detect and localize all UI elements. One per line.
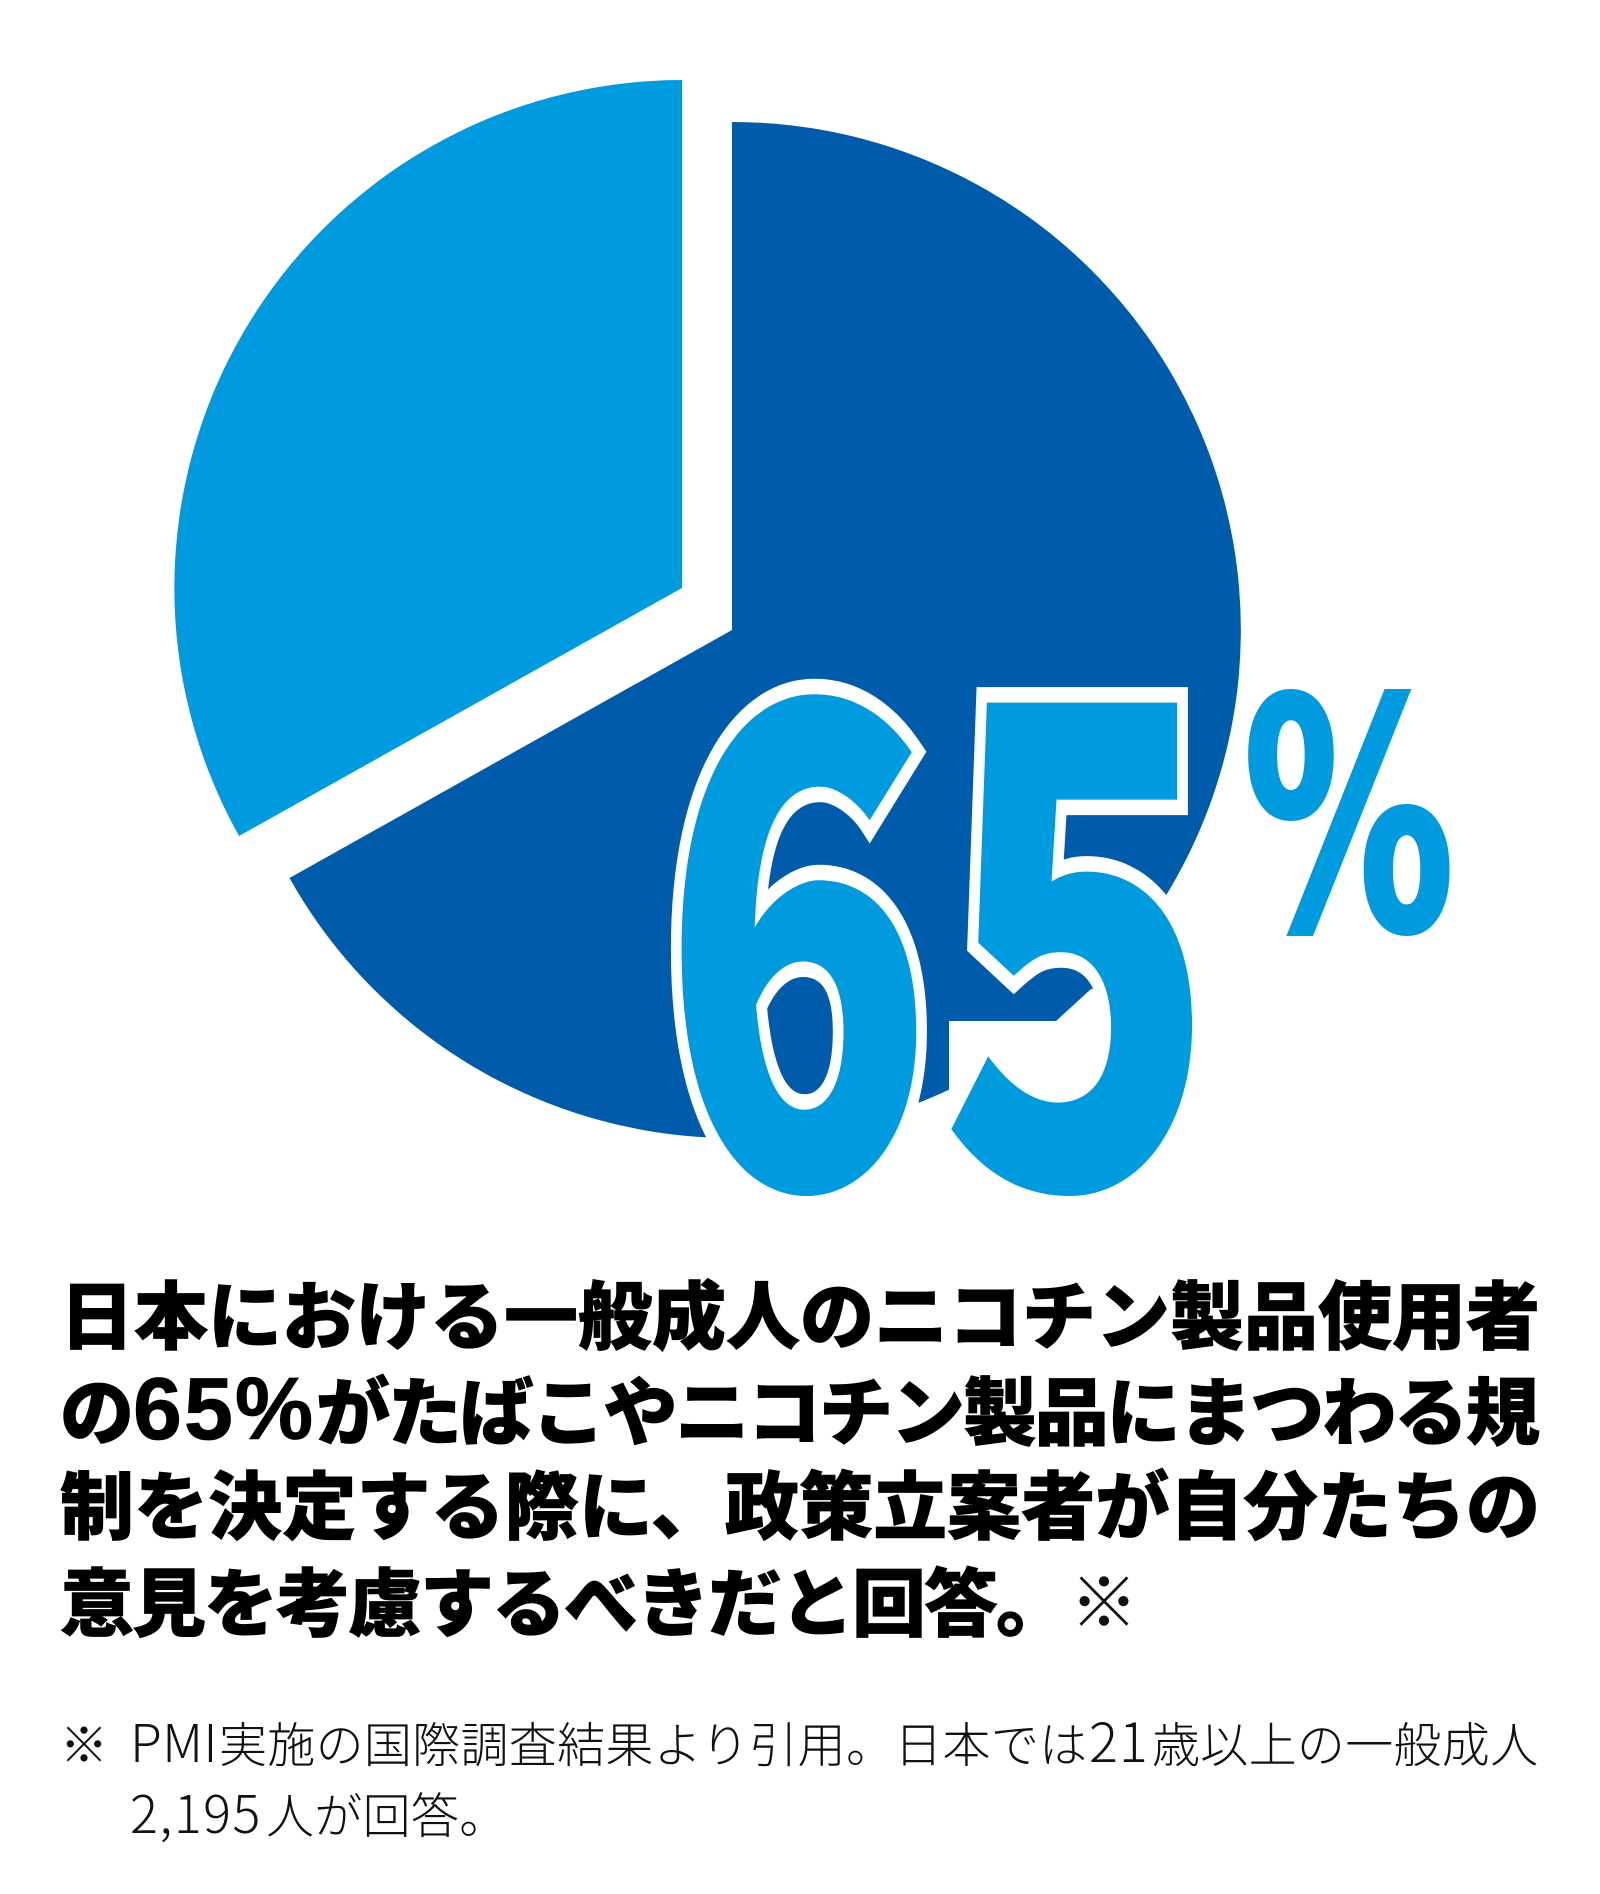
percent sign: % xyxy=(1243,632,1455,1005)
statement line 1: 日本における一般成人のニコチン製品使用者 xyxy=(60,1276,1540,1359)
statement line 2: がたばこやニコチン製品にまつわる規 xyxy=(316,1372,1540,1455)
footnote xyxy=(60,1699,1538,1848)
footnote line 1: 21 xyxy=(1089,1699,1149,1778)
statement footnote mark: ※ xyxy=(1070,1548,1138,1647)
footnote line 1: 歳以上の一般成人 xyxy=(1152,1706,1538,1776)
footnote line 2: 人が回答。 xyxy=(266,1777,508,1847)
statement line 4: 意見を考慮するべきだと回答。 xyxy=(60,1563,1070,1646)
footnote mark: ※ xyxy=(60,1706,108,1776)
pie cut-out behind numeral xyxy=(949,989,1125,1130)
main statement xyxy=(60,1276,1540,1647)
footnote line 1: PMI xyxy=(130,1702,218,1777)
pie slice: 65 percent xyxy=(290,122,1241,1138)
big number 65% xyxy=(661,433,1455,1375)
statement line 2 xyxy=(60,1359,1540,1458)
footnote line 2: 2,195 xyxy=(130,1773,262,1848)
statement line 3: 制を決定する際に、政策立案者が自分たちの xyxy=(60,1466,1540,1549)
pie chart xyxy=(174,80,1241,1138)
statement line 2: 65% xyxy=(133,1359,315,1458)
pie slice: remaining share xyxy=(174,80,682,836)
digit 6: 6 xyxy=(661,433,934,1374)
statement line 2: の xyxy=(60,1372,134,1455)
digit 5: 5 xyxy=(940,433,1217,1375)
footnote line 1: 実施の国際調査結果より引用。日本では xyxy=(219,1706,1087,1776)
